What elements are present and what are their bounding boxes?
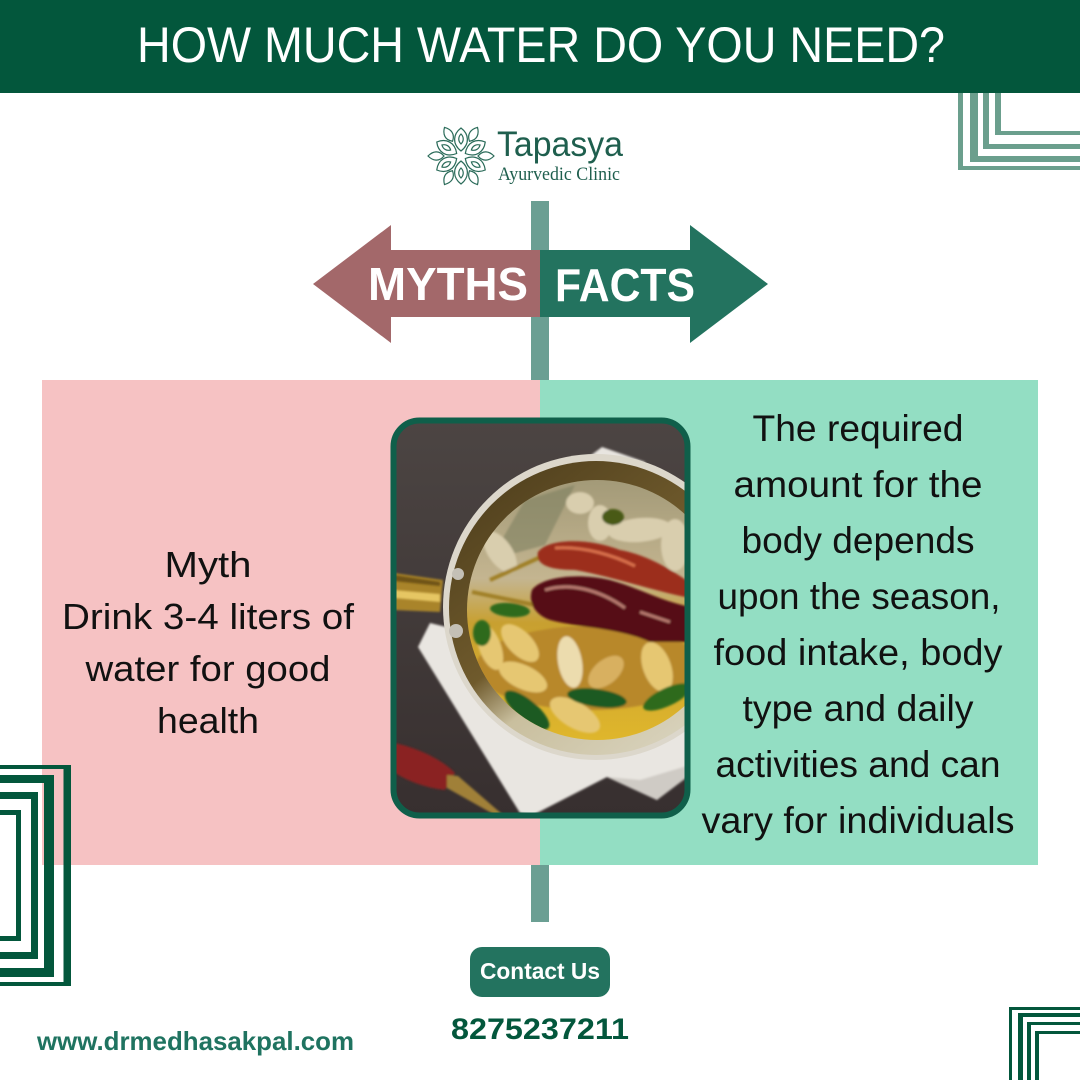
myth text: Drink 3-4 liters of xyxy=(62,596,355,637)
contact button xyxy=(470,947,610,997)
panel: myth xyxy=(42,380,540,865)
red chilli xyxy=(538,541,700,598)
phone number: 8275237211 xyxy=(451,1013,629,1046)
fact text: amount for the xyxy=(734,464,982,505)
pan rim xyxy=(443,454,684,760)
logo wordmark: Tapasya xyxy=(497,125,624,164)
icon: lotus flower mark xyxy=(428,125,494,187)
arrow: facts: FACTS xyxy=(555,259,695,311)
chilli on the table xyxy=(394,743,503,815)
napkin xyxy=(418,447,690,815)
fact text: type and daily xyxy=(742,688,974,729)
contact button: Contact Us xyxy=(480,958,600,984)
garlic cloves xyxy=(476,623,674,734)
fact text: body depends xyxy=(742,520,974,561)
pan handle xyxy=(394,573,443,612)
signpost pole xyxy=(531,201,549,922)
cumin seeds layer xyxy=(475,626,705,710)
myth text: health xyxy=(157,700,259,741)
dark chilli xyxy=(531,576,700,642)
arrow: myths xyxy=(313,225,540,343)
photo: pan of oil with chillies and garlic xyxy=(390,418,690,818)
fact text: food intake, body xyxy=(714,632,1003,673)
fact text: activities and can xyxy=(716,744,1000,785)
photo frame xyxy=(394,420,688,816)
myth text xyxy=(62,544,355,741)
logo: Tapasya Ayurvedic Clinic xyxy=(428,125,624,187)
header banner xyxy=(0,0,1080,93)
decorative corner: bottom right xyxy=(1009,1007,1080,1080)
green herbs xyxy=(473,601,694,736)
myth text: Myth xyxy=(164,544,252,585)
oil xyxy=(467,480,684,740)
pale garlic in the top half xyxy=(484,491,684,573)
decorative corner: top right xyxy=(958,93,1080,170)
fact text: The required xyxy=(752,408,964,449)
chilli stems xyxy=(472,555,545,605)
website: www.drmedhasakpal.com xyxy=(36,1026,354,1056)
fact text: upon the season, xyxy=(718,576,1000,617)
herb leaf on the top xyxy=(602,509,624,525)
fact text xyxy=(702,408,1014,841)
arrow: myths: MYTHS xyxy=(368,258,528,310)
myth text: water for good xyxy=(84,648,331,689)
rivets xyxy=(452,568,464,580)
panel: fact xyxy=(540,380,1038,865)
arrow: facts xyxy=(540,225,768,343)
fact text: vary for individuals xyxy=(702,800,1014,841)
title: HOW MUCH WATER DO YOU NEED? xyxy=(137,17,945,73)
decorative corner: bottom left xyxy=(0,765,71,986)
logo subtitle: Ayurvedic Clinic xyxy=(498,164,620,185)
